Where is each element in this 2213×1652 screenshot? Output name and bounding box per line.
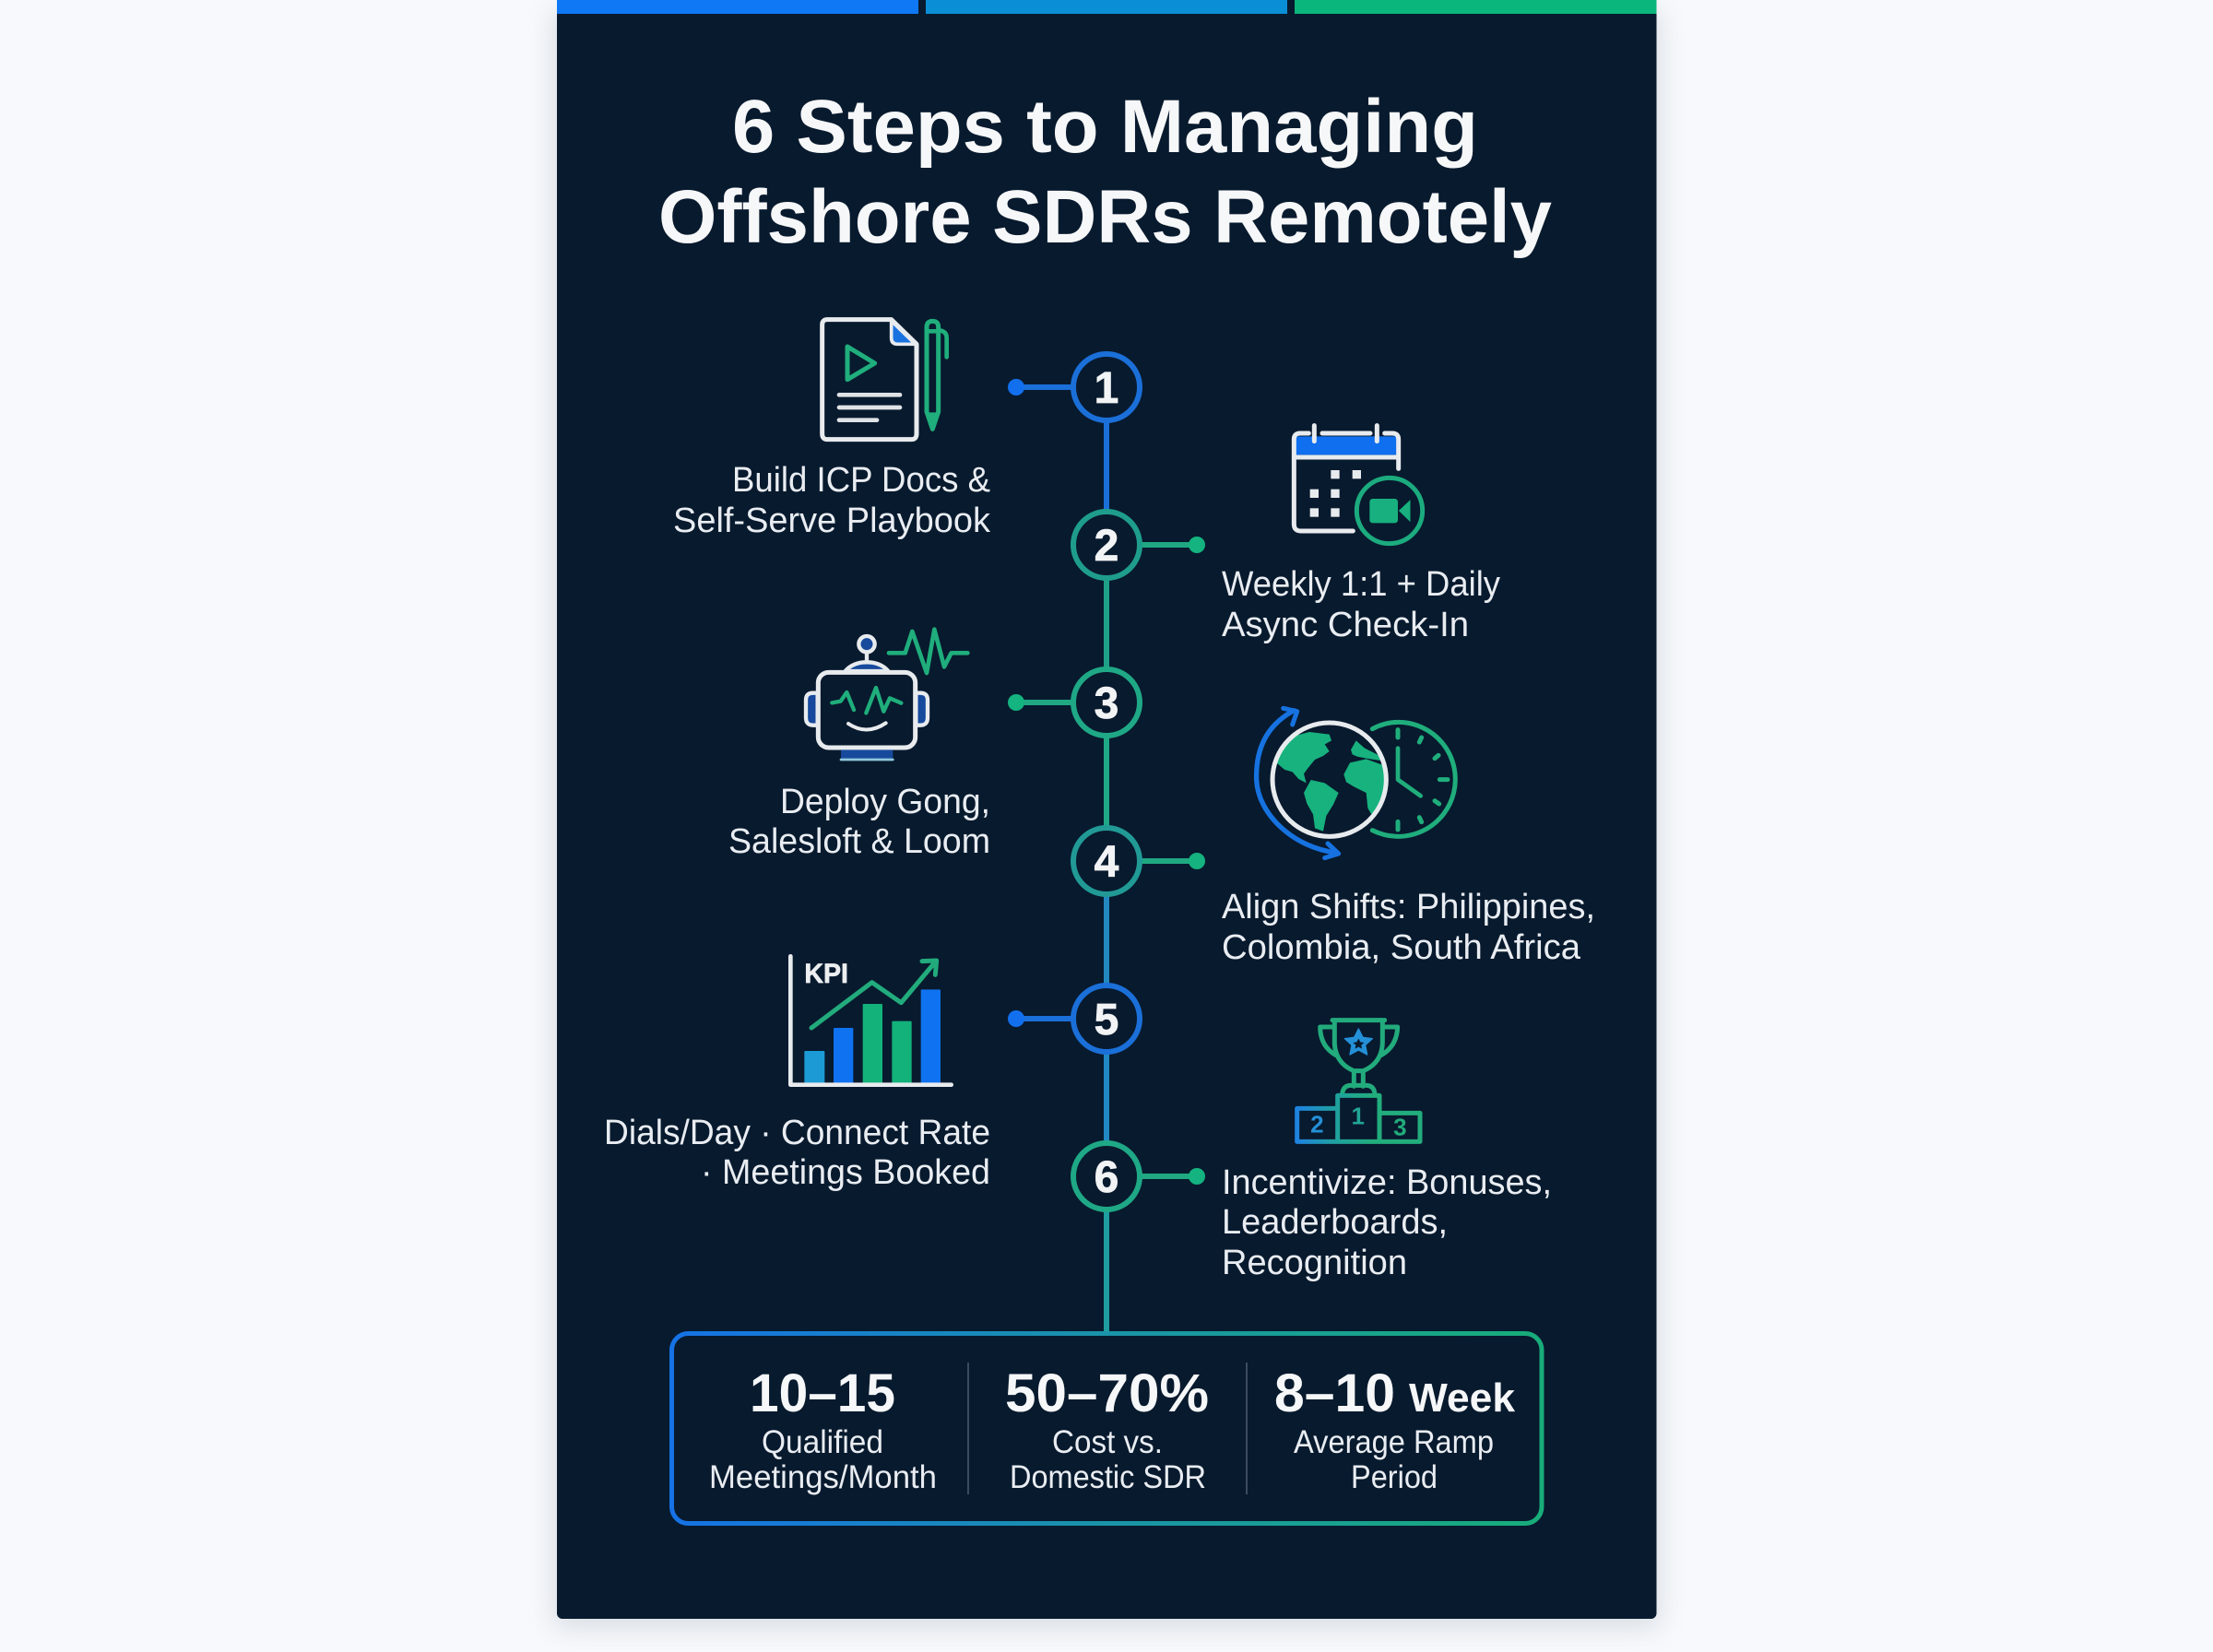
icon: calendar with video — [1294, 426, 1423, 544]
step 5 node — [1008, 985, 1140, 1052]
stat: ramp period: Week — [1409, 1375, 1516, 1421]
text: step 5: · Meetings Booked — [701, 1153, 990, 1192]
stat: qualified meetings — [709, 1363, 937, 1495]
icon: trophy on podium: 2 — [1310, 1110, 1324, 1138]
text: step 2: Weekly 1:1 + Daily — [1222, 565, 1500, 604]
text: step 3 — [728, 783, 990, 861]
text: step 4 — [1222, 888, 1595, 967]
stat: cost: Cost vs. — [1052, 1424, 1163, 1460]
icon: KPI chart — [790, 956, 952, 1085]
stat: qualified meetings: Qualified — [762, 1424, 883, 1460]
title — [658, 85, 1552, 259]
icon: KPI chart: KPI — [804, 959, 848, 989]
text: step 2: Async Check-In — [1222, 606, 1469, 644]
icon: globe, clock and shift arrow — [1257, 708, 1455, 858]
stat: qualified meetings: 10–15 — [750, 1363, 895, 1423]
stat: qualified meetings: Meetings/Month — [709, 1459, 937, 1495]
text: step 6: Leaderboards, — [1222, 1203, 1448, 1242]
stat: cost — [1005, 1363, 1209, 1495]
title: 6 Steps to Managing — [732, 85, 1478, 169]
icon: trophy on podium: 3 — [1393, 1113, 1407, 1140]
step 3 node — [1008, 669, 1140, 736]
text: step 1: Build ICP Docs & — [732, 461, 990, 500]
text: step 1: Self-Serve Playbook — [673, 502, 991, 540]
step 4 node: 4 — [1095, 838, 1119, 887]
text: step 6: Incentivize: Bonuses, — [1222, 1163, 1552, 1202]
step 5 node: 5 — [1095, 996, 1118, 1044]
panel: dark card background — [557, 0, 1656, 1619]
icon: trophy on podium — [1297, 1021, 1420, 1141]
stat: ramp period: Period — [1351, 1459, 1438, 1495]
stat: ramp period — [1274, 1363, 1516, 1495]
step 2 node — [1073, 512, 1205, 578]
text: step 6 — [1222, 1163, 1552, 1282]
icon: robot with pulse — [806, 630, 967, 760]
text: step 5 — [604, 1114, 990, 1192]
step 2 node: 2 — [1095, 522, 1118, 571]
step 1 node: 1 — [1095, 364, 1118, 413]
text: step 5: Dials/Day · Connect Rate — [604, 1114, 990, 1152]
stat: cost: 50–70% — [1005, 1363, 1209, 1423]
icon: trophy on podium: 1 — [1351, 1102, 1365, 1129]
text: step 2 — [1222, 565, 1500, 644]
text: step 6: Recognition — [1222, 1244, 1407, 1282]
icon: document and pen — [822, 320, 947, 440]
text: step 3: Deploy Gong, — [780, 783, 990, 821]
card shadow — [553, 9, 1660, 1628]
step 6 node: 6 — [1095, 1153, 1118, 1202]
step 6 node — [1073, 1143, 1205, 1210]
text: step 3: Salesloft & Loom — [728, 822, 990, 861]
text: step 1 — [673, 461, 991, 540]
text: step 4: Colombia, South Africa — [1222, 928, 1581, 967]
panel: stats box — [671, 1333, 1542, 1523]
step 1 node — [1008, 354, 1140, 420]
step 4 node — [1073, 828, 1205, 894]
text: step 4: Align Shifts: Philippines, — [1222, 888, 1595, 926]
top tri-colour bars — [557, 0, 1656, 14]
stat: ramp period: 8–10 — [1274, 1363, 1395, 1423]
timeline spine — [1104, 422, 1109, 1331]
step 3 node: 3 — [1095, 679, 1118, 728]
stat: ramp period: Average Ramp — [1294, 1424, 1494, 1460]
title: Offshore SDRs Remotely — [658, 175, 1552, 259]
stat: cost: Domestic SDR — [1010, 1459, 1206, 1495]
